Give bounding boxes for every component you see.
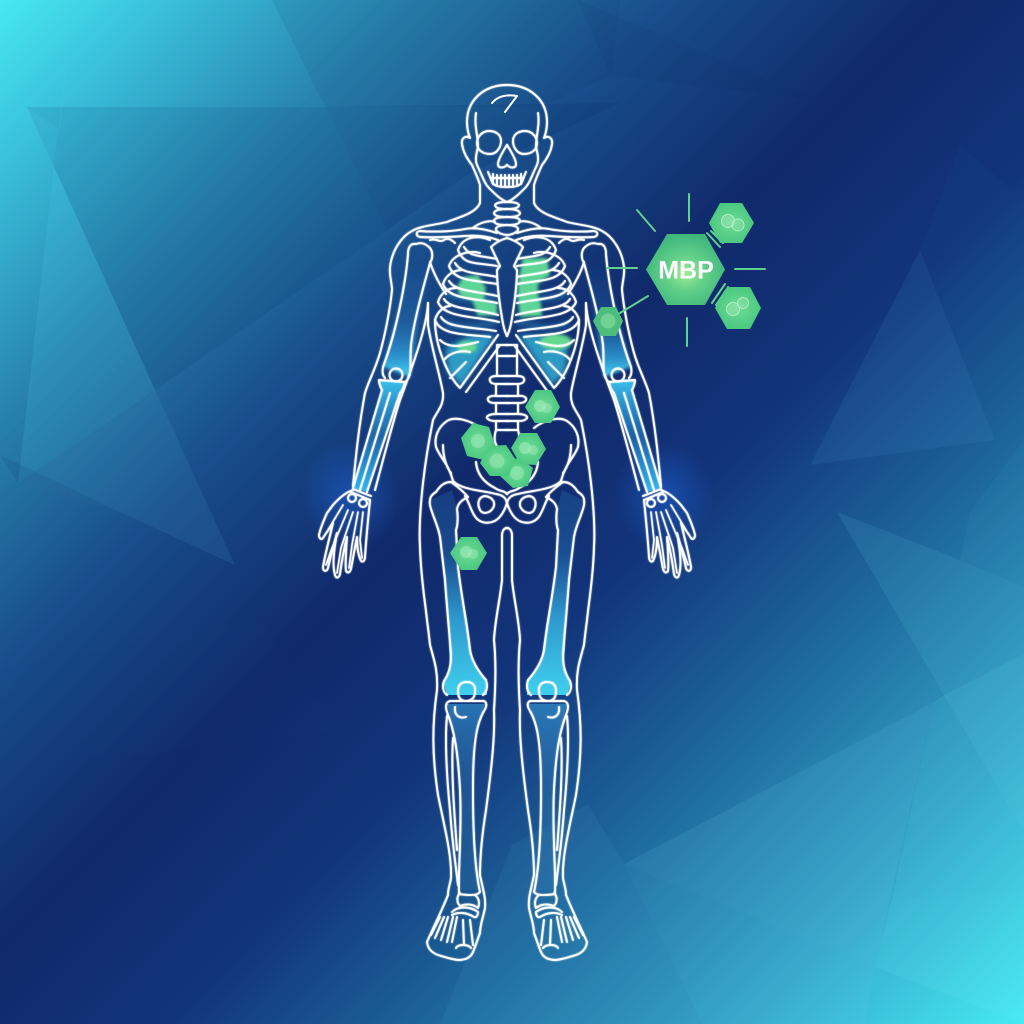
eye socket [477,131,501,154]
chest cells behind ribs [457,258,572,353]
foot [427,895,480,960]
rib 4 [438,288,499,322]
cell lower right [500,458,533,488]
chest lower cage cyan [445,292,569,386]
cell left [461,423,495,460]
small cell hexagon bottom [715,287,761,329]
hand [319,490,370,578]
main MBP hexagon [646,234,725,305]
sacrum bowl [476,462,507,494]
skeleton left half [319,85,507,960]
wrist carpals [348,489,371,507]
lower cage [435,320,500,392]
ilium [435,419,480,481]
MBP connector lines [607,194,765,346]
skull crack [492,95,517,112]
pubis [453,481,507,523]
rib 5 [435,306,496,337]
bone blue fills [353,262,661,890]
nose [498,145,507,168]
cranium and arm outline [353,85,507,486]
sternum [491,238,507,336]
skeleton right half mirrored [507,85,695,960]
rib 2 [449,252,497,284]
tibia head [446,701,486,895]
inner arm [375,303,428,490]
cell upper right [525,390,560,423]
clavicle [417,228,498,240]
patella [458,682,475,701]
fibula [446,716,458,885]
teeth [488,172,507,187]
obturator [478,496,494,513]
cell right [511,433,546,465]
arm hexagon [593,307,623,336]
pelvic and thigh cell cluster [450,390,560,570]
humerus [383,243,432,382]
inner leg [480,528,507,933]
elbow [390,368,402,382]
MBP label: MBP [658,256,714,284]
cell thigh [450,537,487,570]
cell center [480,445,516,476]
skull side and jaw [475,113,507,202]
forearm [353,380,405,492]
knee hook [455,707,466,718]
cervical vertebrae [494,202,507,235]
finger bones [326,505,363,573]
rib 3 [443,270,497,303]
hand glows [300,440,714,550]
tarsals [452,893,479,917]
femur [430,482,487,695]
small cell hexagon top [709,203,754,243]
rib 1 [458,237,497,266]
scapula edge [430,239,455,294]
torso side [420,303,451,895]
lumbar spine [487,345,507,450]
metatarsals [431,917,473,948]
